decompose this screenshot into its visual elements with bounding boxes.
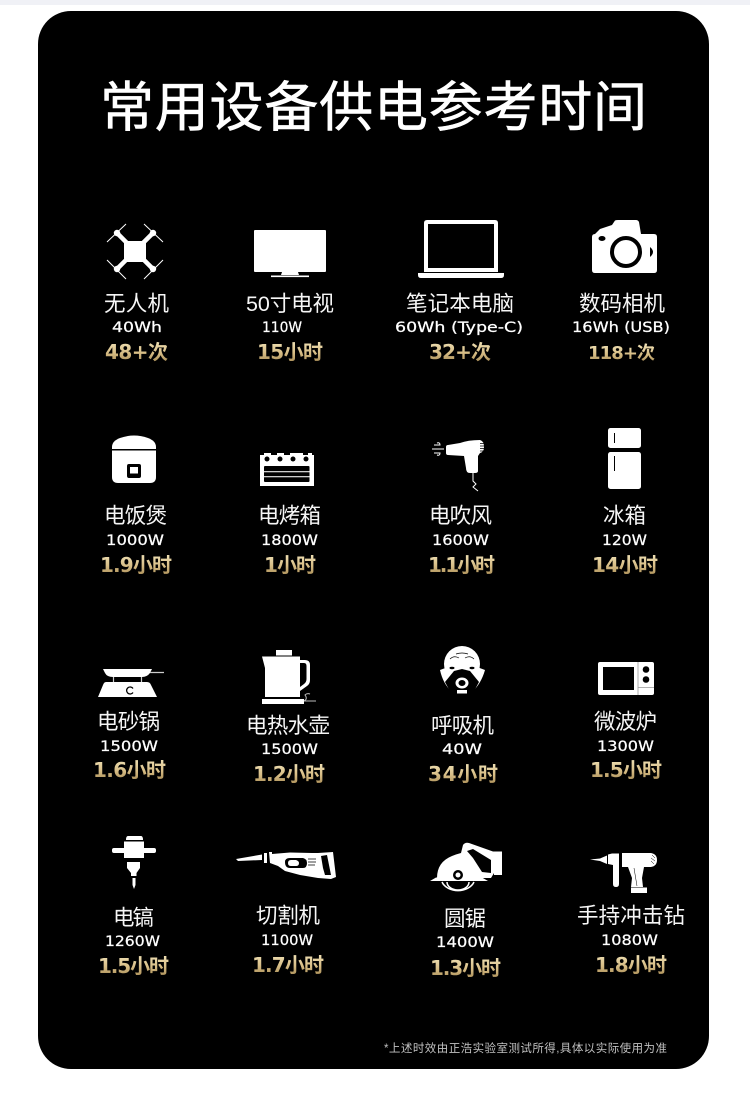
name: 笔记本电脑 [406, 292, 514, 316]
item: hair dryer [428, 440, 495, 577]
power: 1000W [106, 533, 164, 549]
name: 圆锯 [444, 907, 486, 931]
item: laptop [395, 220, 523, 364]
name: 手持冲击钻 [577, 904, 685, 928]
item: reciprocating saw [236, 852, 336, 977]
item: rice cooker [100, 436, 172, 577]
runtime: 1.7小时 [252, 953, 324, 977]
icon: fridge [608, 428, 641, 489]
icon: oven [260, 453, 314, 486]
runtime: 1.1小时 [428, 553, 495, 577]
name: 切割机 [256, 904, 320, 928]
name: 50寸电视 [246, 292, 334, 316]
icon: hair dryer [432, 440, 485, 491]
power: 1500W [100, 739, 158, 755]
icon: TV [254, 230, 326, 277]
power: 40Wh [112, 320, 162, 336]
title: 常用设备供电参考时间 [100, 78, 647, 138]
runtime: 1.5小时 [590, 758, 662, 782]
name: 微波炉 [594, 710, 657, 734]
icon: drone [107, 224, 163, 279]
item: kettle [246, 650, 330, 786]
runtime: 118+次 [588, 343, 655, 364]
item: camera [572, 220, 670, 364]
name: 电砂锅 [97, 710, 160, 734]
icon: electric pot [98, 669, 164, 697]
item: circular saw [430, 843, 502, 980]
item: TV [246, 230, 334, 364]
power: 120W [602, 533, 647, 549]
name: 电饭煲 [104, 504, 167, 528]
runtime: 1.2小时 [253, 762, 325, 786]
icon: demolition hammer [112, 836, 156, 889]
power: 1100W [261, 933, 313, 949]
footnote: *上述时效由正浩实验室测试所得,具体以实际使用为准 [384, 1041, 667, 1055]
runtime: 1小时 [264, 553, 316, 577]
icon: rice cooker [112, 436, 156, 483]
power: 110W [262, 320, 302, 336]
runtime: 15小时 [257, 340, 323, 364]
item: fridge [592, 428, 658, 577]
icon: reciprocating saw [236, 852, 336, 879]
name: 数码相机 [579, 292, 665, 316]
name: 电烤箱 [258, 504, 321, 528]
icon: laptop [418, 220, 504, 278]
runtime: 1.8小时 [595, 953, 667, 977]
runtime: 1.3小时 [430, 956, 501, 980]
name: 冰箱 [603, 504, 646, 528]
power: 1260W [105, 934, 160, 950]
power: 1600W [432, 533, 489, 549]
icon: kettle [262, 650, 316, 704]
icon: camera [592, 220, 657, 273]
power: 16Wh (USB) [572, 320, 670, 336]
power: 1400W [436, 935, 494, 951]
name: 呼吸机 [431, 714, 494, 738]
runtime: 34小时 [428, 762, 498, 786]
icon: circular saw [430, 843, 502, 891]
icon: impact drill [590, 853, 657, 893]
runtime: 1.9小时 [100, 553, 172, 577]
name: 电吹风 [429, 504, 492, 528]
item: impact drill [577, 853, 685, 977]
item: drone [104, 224, 169, 364]
power: 1800W [261, 533, 318, 549]
item: demolition hammer [98, 836, 169, 978]
runtime: 32+次 [429, 340, 491, 364]
runtime: 48+次 [105, 340, 168, 364]
runtime: 1.6小时 [93, 758, 166, 782]
power: 1080W [601, 933, 658, 949]
item: respirator [428, 646, 498, 786]
top strip [0, 0, 750, 5]
name: 无人机 [104, 292, 169, 316]
icon: respirator [440, 646, 485, 695]
item: microwave [590, 662, 662, 782]
item: electric pot [93, 669, 166, 782]
power: 60Wh (Type-C) [395, 320, 523, 336]
item: oven [258, 453, 321, 577]
runtime: 14小时 [592, 553, 658, 577]
runtime: 1.5小时 [98, 954, 169, 978]
name: 电热水壶 [246, 714, 330, 738]
name: 电镐 [113, 906, 154, 930]
power: 1300W [597, 739, 654, 755]
power: 40W [442, 742, 482, 758]
icon: microwave [598, 662, 654, 695]
power: 1500W [261, 742, 318, 758]
